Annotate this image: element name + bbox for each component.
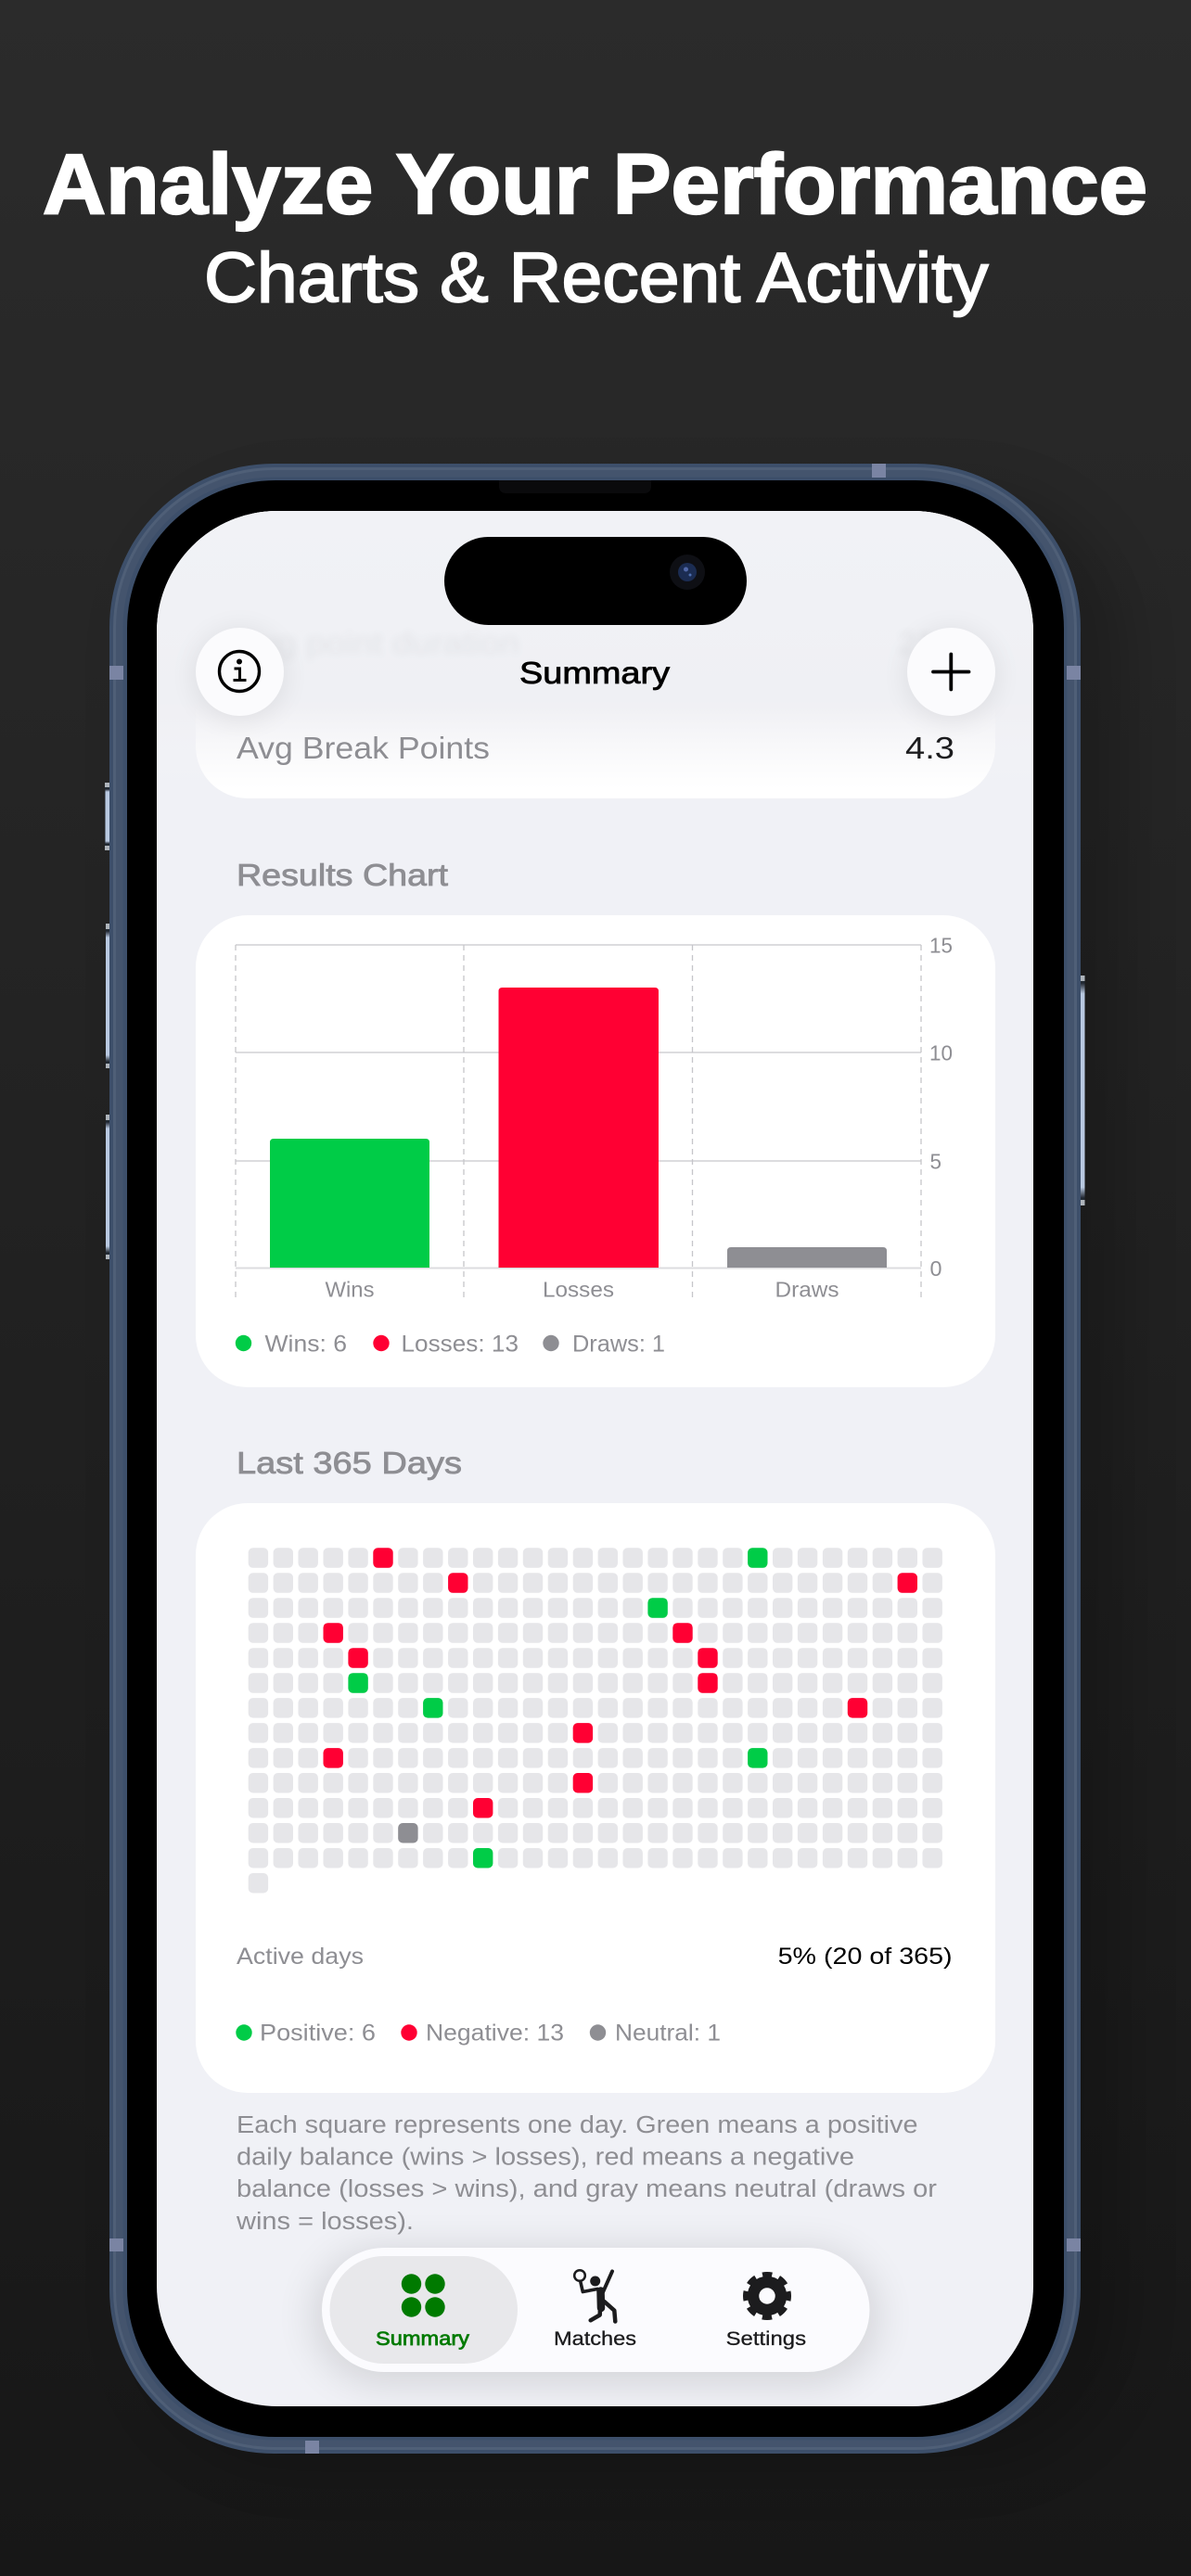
icon: plus <box>933 655 968 690</box>
dynamic island <box>444 537 747 625</box>
tab label: Summary <box>376 2328 470 2350</box>
activity heatmap <box>249 1548 942 1894</box>
x axis labels: Draws <box>775 1278 839 1302</box>
heading: last 365 days: Last 365 Days <box>237 1446 462 1480</box>
y axis labels <box>929 933 953 1281</box>
screen <box>157 464 1033 2406</box>
y axis labels: 0 <box>929 1256 942 1281</box>
chart legend <box>236 1335 664 1352</box>
tab: settings <box>726 2276 806 2350</box>
icon: gear <box>746 2276 788 2316</box>
tab label: Matches <box>554 2328 636 2350</box>
footnote text: balance (losses > wins), and gray means neutral (draws or <box>237 2176 938 2202</box>
side buttons left <box>105 783 109 1259</box>
earpiece speaker <box>499 480 651 493</box>
tab label: Settings <box>726 2328 806 2350</box>
x axis labels: Wins <box>325 1278 375 1302</box>
footnote text: Each square represents one day. Green means a positive <box>237 2112 918 2138</box>
chart legend: Wins: 6 <box>265 1332 347 1358</box>
camera lens <box>670 555 705 590</box>
icon: info <box>219 651 260 692</box>
chart legend: Draws: 1 <box>572 1332 665 1358</box>
nav title: Summary <box>519 656 671 690</box>
icon: four dots <box>402 2274 445 2317</box>
icon: tennis player <box>574 2270 615 2322</box>
active days value: 5% (20 of 365) <box>778 1944 953 1970</box>
stat value: 4.3 <box>905 731 954 765</box>
phone mockup <box>105 464 1085 2454</box>
info button <box>193 628 286 721</box>
bar chart <box>236 933 953 1302</box>
bar: draws <box>727 1247 887 1268</box>
bar: wins <box>270 1139 429 1268</box>
tab: summary <box>330 2256 518 2364</box>
chart legend: Losses: 13 <box>401 1332 519 1358</box>
antenna bands <box>109 464 1081 2454</box>
blurred scrolled row: Avg point duration <box>237 626 519 660</box>
title: Analyze Your Performance <box>43 137 1147 232</box>
heatmap legend: Positive: 6 <box>260 2020 376 2046</box>
blurred scrolled row <box>237 626 952 660</box>
x axis labels: Losses <box>543 1278 614 1302</box>
tab bar <box>322 2248 870 2372</box>
y axis labels: 5 <box>929 1150 941 1174</box>
side button right <box>1081 976 1085 1205</box>
x axis labels <box>325 1282 839 1296</box>
heatmap legend: Neutral: 1 <box>615 2020 721 2046</box>
blurred scrolled row: 21s <box>898 626 952 660</box>
footnote text <box>236 2112 938 2235</box>
footnote text: daily balance (wins > losses), red means a negative <box>237 2144 854 2170</box>
heatmap legend <box>236 2023 720 2046</box>
heading: results chart: Results Chart <box>237 858 448 892</box>
stat label: Avg Break Points <box>237 731 490 765</box>
footnote text: wins = losses). <box>236 2209 414 2235</box>
panel: stats card <box>157 511 1033 798</box>
bar: losses <box>499 988 659 1268</box>
phone shadow <box>139 491 1122 2467</box>
tab: matches <box>554 2270 636 2350</box>
subtitle: Charts & Recent Activity <box>204 239 989 318</box>
phone frame <box>109 464 1081 2454</box>
add button <box>905 628 998 721</box>
panel: last 365 days <box>196 1503 995 2093</box>
heatmap legend: Negative: 13 <box>426 2020 564 2046</box>
active days label: Active days <box>237 1944 364 1970</box>
y axis labels: 10 <box>929 1040 953 1065</box>
y axis labels: 15 <box>929 933 953 957</box>
panel: results chart <box>196 915 995 1387</box>
nav fade overlay <box>157 511 1033 740</box>
tab bar shadow <box>315 2251 876 2381</box>
